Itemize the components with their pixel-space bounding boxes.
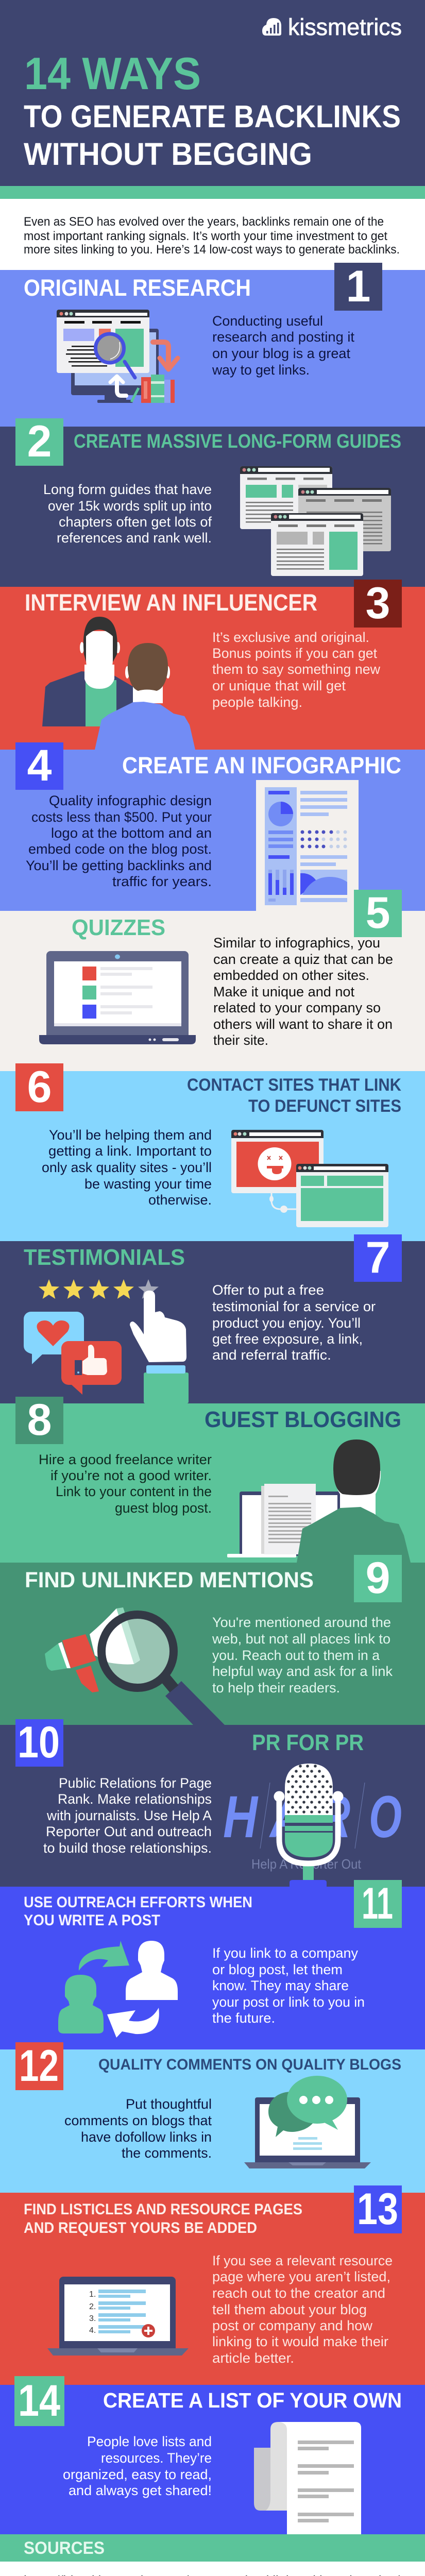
body text bbox=[39, 1452, 212, 1516]
body text: Put thoughtful bbox=[126, 2096, 212, 2112]
heading: FIND UNLINKED MENTIONS bbox=[25, 1568, 314, 1592]
number badge 7 bbox=[354, 1233, 402, 1282]
number badge 3 bbox=[354, 579, 402, 628]
body text: know. They may share bbox=[212, 1978, 349, 1993]
icon: star rating bbox=[39, 1279, 159, 1299]
body text: with journalists. Use Help A bbox=[46, 1808, 212, 1823]
icon: interview people bbox=[42, 617, 195, 750]
intro text: Even as SEO has evolved over the years, backlinks remain one of the bbox=[24, 215, 384, 229]
icon: stacked browser windows bbox=[240, 466, 391, 576]
panel: header bbox=[0, 0, 425, 186]
panel: 2 long-form guides bbox=[0, 417, 425, 587]
icon: heart bubble bbox=[24, 1312, 84, 1364]
body text: post or company and how bbox=[212, 2318, 372, 2333]
body text: helpful way and ask for a link bbox=[212, 1664, 393, 1679]
body text: to build those relationships. bbox=[43, 1840, 212, 1856]
body text: product you enjoy. You’ll bbox=[212, 1315, 361, 1331]
body text: testimonial for a service or bbox=[212, 1299, 376, 1314]
number badge 2: 2 bbox=[27, 417, 52, 466]
heading: YOU WRITE A POST bbox=[24, 1912, 160, 1929]
panel: 6 contact sites bbox=[0, 1062, 425, 1241]
heading: INTERVIEW AN INFLUENCER bbox=[25, 589, 317, 616]
icon: infographic page bbox=[256, 780, 359, 911]
number badge 6 bbox=[15, 1062, 63, 1112]
panel: intro bbox=[0, 199, 425, 270]
panel: 8 guest blogging bbox=[0, 1395, 425, 1563]
body text: Long form guides that have bbox=[43, 482, 212, 497]
body text: organized, easy to read, bbox=[63, 2467, 212, 2482]
body text: the comments. bbox=[122, 2145, 212, 2161]
heading: PR FOR PR bbox=[252, 1730, 364, 1755]
icon: laptop with numbered list: 4. bbox=[89, 2326, 96, 2335]
body text bbox=[212, 1615, 393, 1696]
icon: microphone bbox=[274, 1764, 343, 1887]
heading bbox=[187, 1075, 401, 1116]
number badge 9: 9 bbox=[366, 1553, 390, 1603]
body text: and referral traffic. bbox=[212, 1347, 331, 1363]
body text: Link to your content in the bbox=[56, 1484, 212, 1499]
panel: 5 quizzes bbox=[0, 888, 425, 1071]
body text: embedded on other sites. bbox=[213, 968, 369, 983]
HARO caption: Help A Reporter Out bbox=[251, 1856, 362, 1872]
body text bbox=[212, 1945, 365, 2026]
body text: Bonus points if you can get bbox=[212, 646, 377, 661]
icon: megaphone under magnifier bbox=[45, 1607, 225, 1725]
heading: GUEST BLOGGING bbox=[205, 1407, 401, 1432]
body text: article better. bbox=[212, 2350, 294, 2366]
number badge 9 bbox=[354, 1553, 402, 1603]
sources heading: SOURCES bbox=[24, 2538, 105, 2558]
number badge 1 bbox=[334, 262, 382, 311]
heading: TESTIMONIALS bbox=[24, 1245, 185, 1270]
panel: 7 testimonials bbox=[0, 1233, 425, 1403]
intro text: most important ranking signals. It’s worth your time investment to get bbox=[24, 229, 387, 243]
HARO wordmark: O bbox=[369, 1784, 402, 1850]
body text: your post or link to you in bbox=[212, 1994, 365, 2010]
number badge 7: 7 bbox=[366, 1233, 390, 1282]
icon: paper scroll list bbox=[254, 2422, 361, 2534]
body text: page where you aren’t listed, bbox=[212, 2269, 390, 2284]
body text bbox=[212, 2253, 393, 2366]
icon: broken site and replacement site bbox=[231, 1130, 388, 1227]
body text: costs less than $500. Put your bbox=[31, 809, 212, 825]
body text bbox=[64, 2096, 212, 2161]
intro text: more sites linking to you. Here’s 14 low-cost ways to generate backlinks. bbox=[24, 243, 400, 257]
heading: ORIGINAL RESEARCH bbox=[24, 275, 251, 301]
body text: can create a quiz that can be bbox=[213, 952, 393, 967]
icon: laptop with chat bubbles bbox=[244, 2076, 371, 2168]
body text: Conducting useful bbox=[212, 313, 323, 329]
number badge 10: 10 bbox=[18, 1718, 60, 1767]
body text: over 15k words split up into bbox=[48, 498, 212, 514]
icon: two people with arrows bbox=[58, 1941, 178, 2038]
body text: comments on blogs that bbox=[64, 2113, 212, 2128]
body text: It’s exclusive and original. bbox=[212, 630, 369, 645]
HARO wordmark: R bbox=[322, 1784, 350, 1850]
body text: resources. They’re bbox=[101, 2450, 212, 2466]
body text: others will want to share it on bbox=[213, 1016, 393, 1032]
body text: If you see a relevant resource bbox=[212, 2253, 393, 2268]
heading: USE OUTREACH EFFORTS WHEN bbox=[24, 1894, 252, 1911]
HARO wordmark: H bbox=[223, 1784, 259, 1850]
icon: laptop with numbered list: 3. bbox=[89, 2314, 96, 2323]
number badge 8: 8 bbox=[27, 1395, 52, 1445]
body text bbox=[26, 793, 212, 889]
body text: related to your company so bbox=[213, 1000, 381, 1015]
body text: their site. bbox=[213, 1032, 268, 1048]
body text: You’ll be helping them and bbox=[49, 1127, 212, 1143]
body text: Quality infographic design bbox=[49, 793, 212, 808]
body text: the future. bbox=[212, 2010, 275, 2026]
panel: 12 quality comments bbox=[0, 2041, 425, 2193]
heading bbox=[24, 2201, 302, 2236]
icon: laptop with numbered list: 2. bbox=[89, 2302, 96, 2311]
heading: QUALITY COMMENTS ON QUALITY BLOGS bbox=[98, 2056, 401, 2073]
panel: 4 create an infographic bbox=[0, 741, 425, 911]
icon: quiz laptop bbox=[39, 951, 196, 1044]
body text: you. Reach out to them in a bbox=[212, 1648, 380, 1663]
number badge 1: 1 bbox=[346, 262, 370, 311]
panel: sources bbox=[0, 2534, 425, 2576]
body text: way to get links. bbox=[212, 362, 310, 378]
body text: reach out to the creator and bbox=[212, 2285, 385, 2301]
logo: kissmetrics (top): kissmetrics bbox=[288, 14, 402, 40]
number badge 2 bbox=[15, 417, 63, 466]
HARO wordmark bbox=[223, 1783, 402, 1850]
body text: if you’re not a good writer. bbox=[50, 1468, 212, 1483]
body text: linking to it would make their bbox=[212, 2334, 388, 2349]
body text: You're mentioned around the bbox=[212, 1615, 391, 1630]
heading: FIND LISTICLES AND RESOURCE PAGES bbox=[24, 2201, 302, 2218]
body text: Hire a good freelance writer bbox=[39, 1452, 212, 1467]
body text: tell them about your blog bbox=[212, 2302, 367, 2317]
title: 14 WAYS bbox=[24, 48, 201, 99]
icon: laptop with numbered list: 1. bbox=[89, 2290, 96, 2299]
body text bbox=[43, 482, 212, 546]
body text: have dofollow links in bbox=[81, 2129, 212, 2145]
body text bbox=[63, 2434, 212, 2498]
icon: writer at laptop bbox=[227, 1439, 411, 1563]
body text: embed code on the blog post. bbox=[28, 841, 212, 857]
body text: People love lists and bbox=[87, 2434, 212, 2449]
body text: You’ll be getting backlinks and bbox=[26, 858, 212, 873]
panel: 11 use outreach efforts bbox=[0, 1879, 425, 2049]
body text: Reporter Out and outreach bbox=[46, 1824, 212, 1839]
heading: CREATE A LIST OF YOUR OWN bbox=[103, 2388, 402, 2412]
panel: 13 find listicles bbox=[0, 2184, 425, 2385]
body text bbox=[43, 1775, 212, 1856]
body text: on your blog is a great bbox=[212, 346, 350, 361]
body text: guest blog post. bbox=[115, 1500, 212, 1516]
number badge 11: 11 bbox=[362, 1879, 393, 1928]
HARO wordmark: A bbox=[269, 1784, 304, 1850]
number badge 4 bbox=[15, 741, 63, 790]
body text: people talking. bbox=[212, 694, 302, 710]
body text: If you link to a company bbox=[212, 1945, 358, 1961]
body text: web, but not all places link to bbox=[212, 1631, 390, 1647]
panel: 9 find unlinked mentions bbox=[0, 1553, 425, 1725]
number badge 13: 13 bbox=[357, 2184, 398, 2234]
body text: traffic for years. bbox=[112, 874, 212, 889]
body text: or unique that will get bbox=[212, 678, 346, 693]
body text bbox=[212, 1282, 376, 1363]
body text bbox=[42, 1127, 212, 1208]
number badge 8 bbox=[15, 1395, 63, 1445]
heading: TO DEFUNCT SITES bbox=[248, 1096, 401, 1116]
number badge 6: 6 bbox=[27, 1062, 52, 1112]
body text: Offer to put a free bbox=[212, 1282, 324, 1298]
body text: Make it unique and not bbox=[213, 984, 354, 999]
green band bbox=[0, 186, 425, 199]
number badge 5 bbox=[354, 888, 402, 938]
icon: pointing hand bbox=[130, 1291, 189, 1403]
icon: research on monitor bbox=[57, 310, 178, 403]
body text: research and posting it bbox=[212, 329, 354, 345]
body text: get free exposure, a link, bbox=[212, 1331, 363, 1347]
body text: only ask quality sites - you’ll bbox=[42, 1160, 212, 1175]
body text bbox=[212, 313, 354, 378]
body text bbox=[213, 935, 393, 1048]
title: WITHOUT BEGGING bbox=[24, 137, 312, 172]
title bbox=[24, 48, 401, 172]
body text: Rank. Make relationships bbox=[58, 1791, 212, 1807]
icon: thumbs-up bubble bbox=[61, 1341, 122, 1395]
body text: references and rank well. bbox=[57, 530, 212, 546]
heading: QUIZZES bbox=[72, 915, 165, 940]
heading bbox=[24, 1894, 252, 1929]
panel: 10 pr for pr bbox=[0, 1718, 425, 1887]
number badge 12: 12 bbox=[19, 2041, 59, 2091]
body text: them to say something new bbox=[212, 662, 380, 677]
body text: Public Relations for Page bbox=[59, 1775, 212, 1791]
body text: or blog post, let them bbox=[212, 1962, 343, 1977]
number badge 5: 5 bbox=[366, 888, 390, 938]
body text: logo at the bottom and an bbox=[51, 825, 212, 841]
body text: otherwise. bbox=[148, 1192, 212, 1208]
heading: CONTACT SITES THAT LINK bbox=[187, 1075, 401, 1095]
heading: AND REQUEST YOURS BE ADDED bbox=[24, 2219, 257, 2236]
number badge 4: 4 bbox=[27, 741, 52, 790]
number badge 3: 3 bbox=[366, 579, 390, 628]
heading: CREATE AN INFOGRAPHIC bbox=[122, 752, 401, 778]
panel: 1 original research bbox=[0, 262, 425, 427]
body text bbox=[212, 630, 380, 710]
number badge 14: 14 bbox=[18, 2376, 60, 2426]
panel: 14 create a list bbox=[0, 2376, 425, 2534]
body text: getting a link. Important to bbox=[48, 1143, 212, 1159]
body text: chapters often get lots of bbox=[59, 514, 212, 530]
body text: Similar to infographics, you bbox=[213, 935, 380, 951]
body text: be wasting your time bbox=[84, 1176, 212, 1192]
body text: to help their readers. bbox=[212, 1680, 340, 1696]
panel: 3 interview an influencer bbox=[0, 579, 425, 750]
body text: and always get shared! bbox=[69, 2483, 212, 2498]
intro text bbox=[24, 215, 400, 257]
icon: laptop with numbered list bbox=[47, 2277, 189, 2355]
